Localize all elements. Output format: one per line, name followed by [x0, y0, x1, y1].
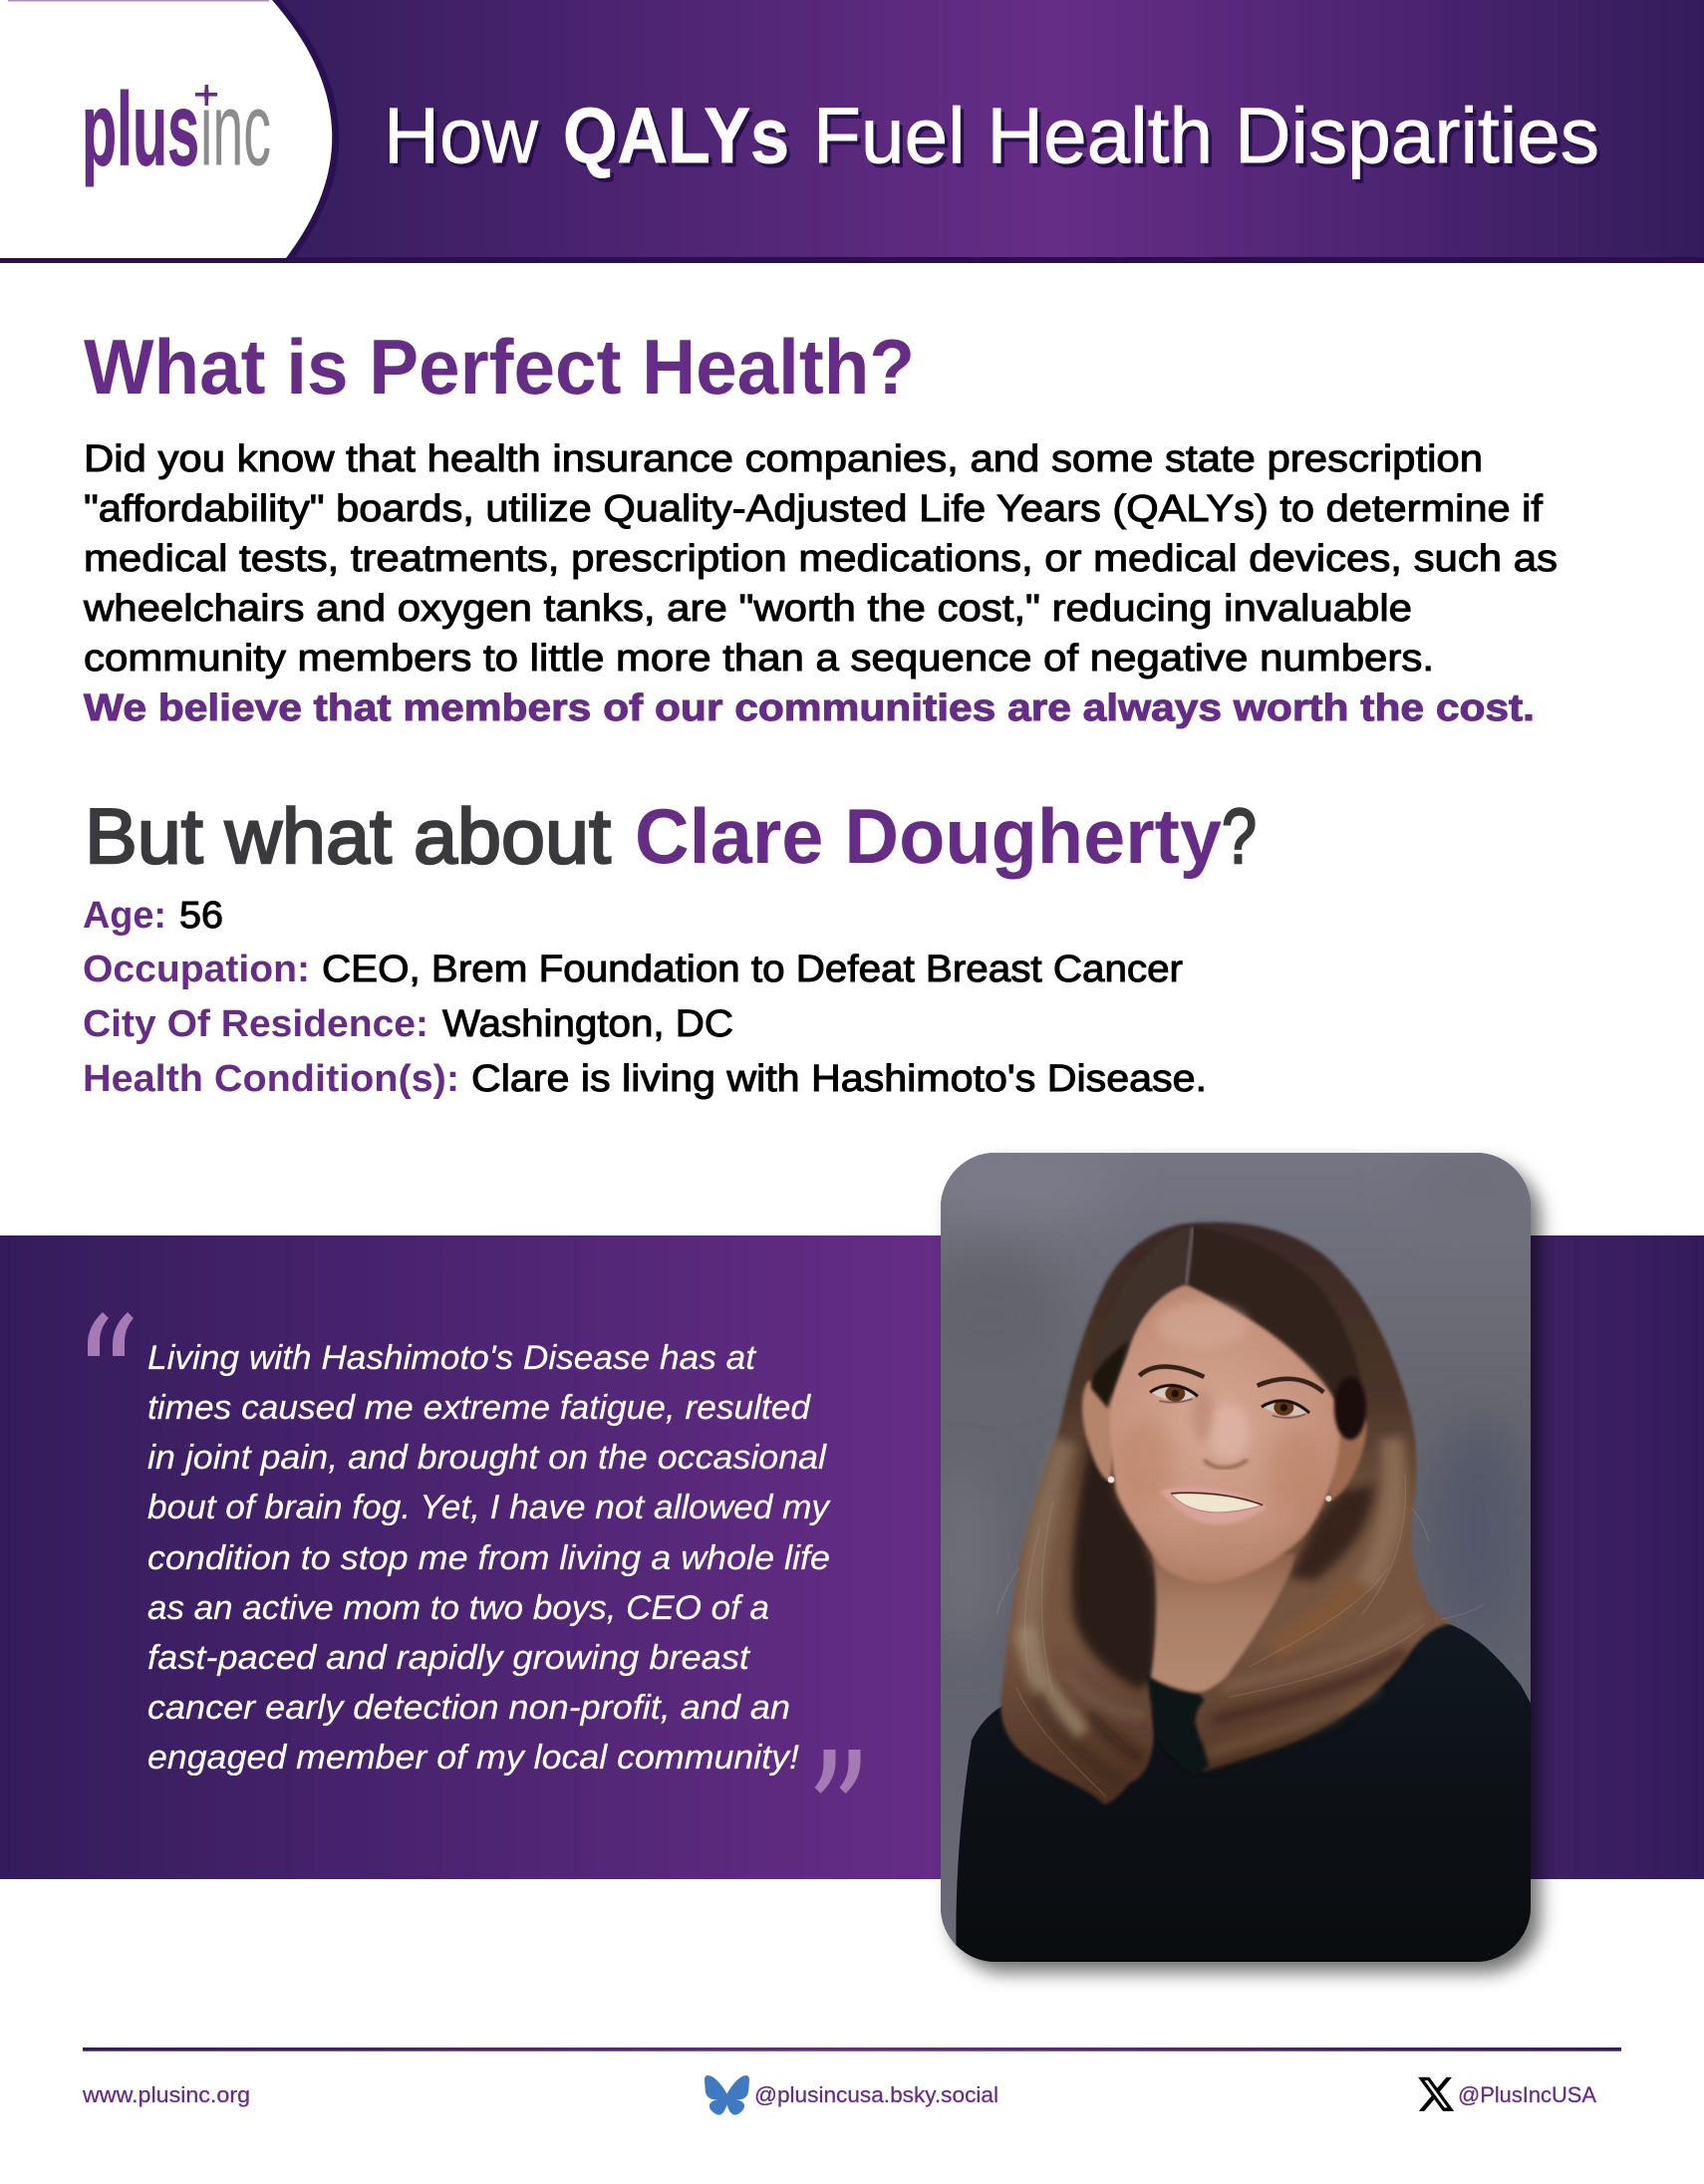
emphasis sentence: We believe that members of our communities are always worth the cost.: [84, 687, 1535, 729]
profile details: Health Condition(s):: [83, 1058, 459, 1100]
intro paragraph: medical tests, treatments, prescription medications, or medical devices, such as: [84, 538, 1558, 580]
sweater: [956, 1622, 1535, 1966]
photo background: [937, 1149, 1535, 1966]
title: QALYs: [563, 91, 789, 179]
eyebrows: [1139, 1367, 1204, 1377]
profile details: [83, 895, 1207, 1100]
quote text: fast-paced and rapidly growing breast: [147, 1639, 750, 1677]
quote text: bout of brain fog. Yet, I have not allowed my: [147, 1489, 831, 1526]
title: Fuel Health Disparities: [813, 91, 1599, 179]
heading: But what about Clare Dougherty?: [85, 792, 1257, 880]
footer: website: www.plusinc.org: [82, 2082, 250, 2107]
collar: [1148, 1674, 1209, 1775]
intro paragraph: Did you know that health insurance companies, and some state prescription: [84, 438, 1483, 480]
quote text: times caused me extreme fatigue, resulted: [147, 1389, 812, 1427]
footer rule: [83, 2048, 1621, 2051]
hair: fine strands: [996, 1475, 1485, 1796]
ears: [1082, 1380, 1114, 1482]
hair parting: [1187, 1228, 1193, 1283]
heading: But what about Clare Dougherty?: But what about: [85, 792, 611, 880]
facial shading: [1118, 1302, 1323, 1567]
heading: What is Perfect Health?: What is Perfect Health?: [84, 323, 915, 410]
logo: plusinc: inc: [200, 72, 271, 187]
footer: bluesky handle: [705, 2075, 998, 2115]
quote text: cancer early detection non-profit, and an: [147, 1689, 790, 1727]
title: How: [384, 91, 539, 179]
intro paragraph: [83, 438, 1558, 729]
profile details: Age:: [83, 895, 166, 937]
profile details: Occupation:: [83, 949, 310, 990]
footer: X handle: @PlusIncUSA: [1458, 2082, 1596, 2107]
hair: left of parting: [1091, 1228, 1188, 1395]
logo: plusinc: plus: [82, 72, 199, 187]
eyes: [1150, 1385, 1309, 1418]
quote text: [147, 1339, 831, 1776]
quote text: condition to stop me from living a whole life: [147, 1539, 830, 1577]
heading: But what about Clare Dougherty?: ?: [1222, 792, 1257, 880]
panel: quote band: [0, 1235, 1704, 1879]
profile details: City Of Residence:: [83, 1003, 428, 1045]
footer: bluesky handle: @plusincusa.bsky.social: [754, 2082, 998, 2107]
neck: [1151, 1554, 1295, 1692]
header banner: [0, 0, 1704, 263]
hair: light outer band: [1026, 1438, 1394, 1734]
face: [1109, 1283, 1340, 1583]
intro paragraph: "affordability" boards, utilize Quality-Adjusted Life Years (QALYs) to determine if: [84, 488, 1543, 530]
title: [384, 91, 1599, 179]
quote text: engaged member of my local community!: [147, 1739, 799, 1776]
mouth: [1160, 1487, 1268, 1524]
profile details: Washington, DC: [442, 1003, 733, 1045]
quote text: as an active mom to two boys, CEO of a: [147, 1589, 769, 1627]
hair: fringe right of parting: [1186, 1228, 1363, 1405]
hair mass: [1000, 1223, 1455, 1804]
hair: dark inner left: [1071, 1438, 1158, 1691]
icon: X logo: [1418, 2077, 1454, 2111]
intro paragraph: community members to little more than a sequence of negative numbers.: [84, 638, 1434, 680]
nose: [1204, 1460, 1248, 1468]
quote text: Living with Hashimoto's Disease has at: [147, 1339, 756, 1377]
icon: bluesky butterfly: [705, 2075, 749, 2115]
profile details: 56: [179, 895, 223, 937]
hair: lower layers: [1036, 1614, 1422, 1783]
earrings: [1108, 1477, 1114, 1483]
quote text: in joint pain, and brought on the occasional: [147, 1439, 827, 1477]
logo badge: [0, 0, 339, 258]
intro paragraph: wheelchairs and oxygen tanks, are "worth the cost," reducing invaluable: [83, 588, 1412, 630]
heading: But what about Clare Dougherty?: Clare Dougherty: [635, 792, 1222, 880]
footer: X handle: [1418, 2077, 1596, 2111]
profile details: CEO, Brem Foundation to Defeat Breast Cancer: [322, 949, 1183, 990]
profile details: Clare is living with Hashimoto's Disease.: [471, 1058, 1207, 1100]
hair: dark behind right ear: [1288, 1485, 1373, 1581]
photo: portrait of Clare Dougherty: [914, 1146, 1552, 1966]
icon: opening quote mark: [88, 1312, 134, 1356]
icon: closing quote mark: [815, 1750, 861, 1793]
